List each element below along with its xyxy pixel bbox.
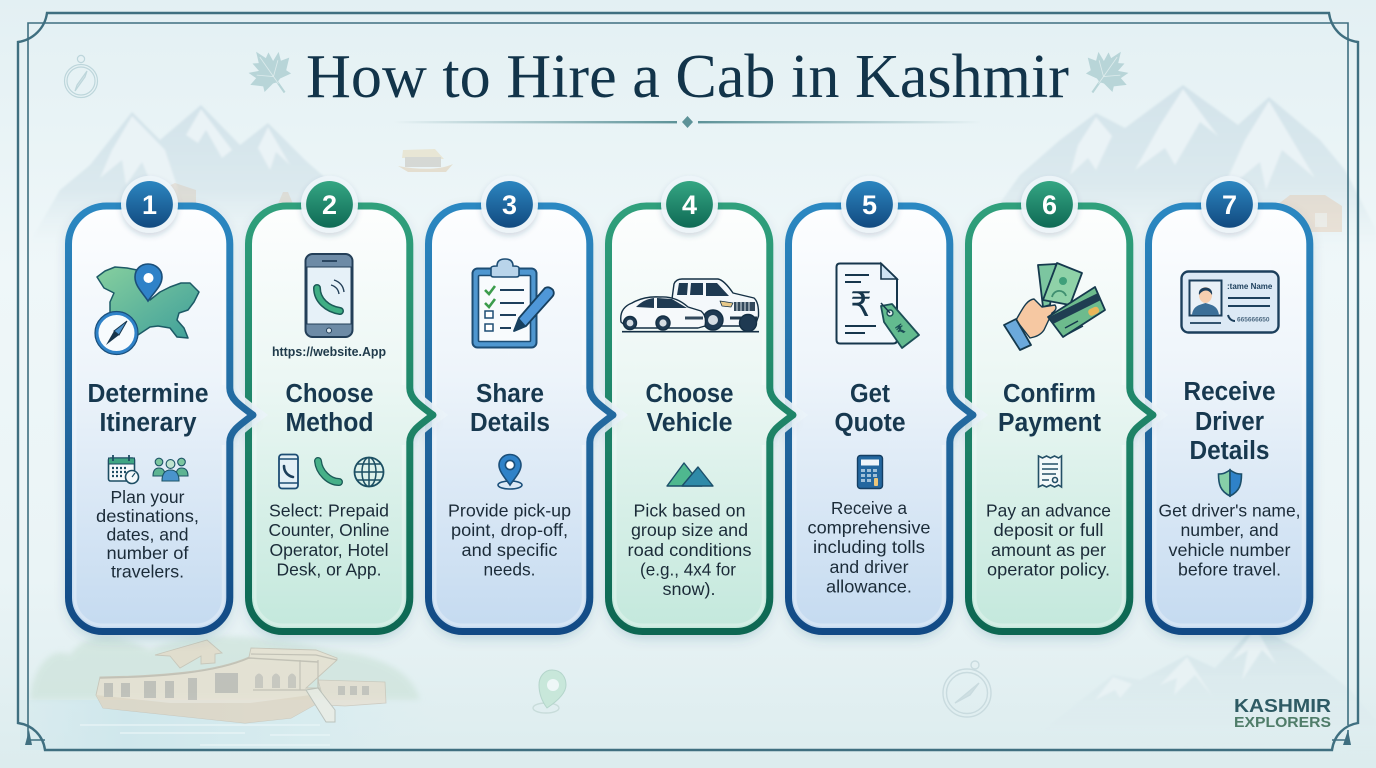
compass decoration bottom <box>943 661 991 717</box>
heading <box>286 380 374 437</box>
heading: Confirm <box>1003 380 1096 408</box>
description: needs. <box>484 560 536 580</box>
description: Operator, Hotel <box>270 540 388 560</box>
number badge 4 <box>661 176 718 233</box>
heading: Choose <box>286 380 374 408</box>
description: travelers. <box>111 562 184 582</box>
number badge 3 <box>481 176 538 233</box>
mountains top right <box>970 85 1376 250</box>
panel: step 5 get quote <box>788 176 973 632</box>
description: (e.g., 4x4 for <box>640 560 736 580</box>
icon row: phone, handset, globe <box>279 454 384 488</box>
description: snow). <box>662 579 716 599</box>
panel: step 3 share details <box>428 176 613 632</box>
maple leaf left <box>237 38 304 106</box>
number badge 2: 2 <box>322 190 337 220</box>
icon: quote document with rupee tag: ₹ <box>850 285 872 325</box>
icon: location pin <box>498 454 522 489</box>
number badge 5 <box>841 176 898 233</box>
heading <box>998 380 1101 437</box>
heading <box>834 380 906 437</box>
heading <box>646 380 734 437</box>
number badge 6: 6 <box>1042 190 1057 220</box>
heading: Get <box>850 380 890 408</box>
website label: https://website.App <box>272 345 386 359</box>
mountains top left <box>28 105 385 245</box>
icon: sedan and SUV <box>621 279 759 332</box>
description: Receive a <box>831 498 907 518</box>
number badge 4: 4 <box>682 190 697 220</box>
heading: Quote <box>834 409 906 437</box>
description: and specific <box>462 540 558 560</box>
icon: receipt <box>1038 456 1062 487</box>
compass decoration top left <box>64 55 98 98</box>
description: Counter, Online <box>268 520 390 540</box>
description: Pick based on <box>634 500 746 520</box>
heading: Determine <box>88 380 208 408</box>
icon: shield <box>1218 470 1242 496</box>
number badge 3: 3 <box>502 190 517 220</box>
description: Get driver's name, <box>1158 500 1300 520</box>
icon: driver ID card: 665666650 <box>1237 316 1270 324</box>
icon: clipboard with pencil <box>472 259 554 348</box>
number badge 1 <box>121 176 178 233</box>
icon: quote document with rupee tag: ₹ <box>893 322 909 339</box>
description: and driver <box>830 557 909 577</box>
number badge 7: 7 <box>1222 190 1237 220</box>
panel: step 2 choose method <box>248 176 433 632</box>
description: Provide pick-up <box>448 500 571 520</box>
logo: EXPLORERS <box>1234 715 1331 731</box>
icon: calculator <box>858 456 882 488</box>
icon row: calendar and people <box>108 455 188 484</box>
icon: hand with cash and card <box>1004 263 1105 350</box>
heading: Vehicle <box>646 409 732 437</box>
number badge 1: 1 <box>142 190 157 220</box>
title: How to Hire a Cab in Kashmir <box>306 43 1069 111</box>
icon: driver ID card <box>1182 272 1278 332</box>
description: dates, and <box>106 524 188 544</box>
distant temple <box>160 183 293 204</box>
description: Pay an advance <box>986 500 1111 520</box>
heading: Share <box>476 380 544 408</box>
heading: Choose <box>646 380 734 408</box>
description: before travel. <box>1178 560 1281 580</box>
heading: Itinerary <box>100 409 197 437</box>
distant houseboat right <box>1277 195 1342 232</box>
heading <box>1184 378 1276 465</box>
panel: step 4 choose vehicle <box>608 176 793 632</box>
description: allowance. <box>826 576 912 596</box>
icon: driver ID card: :tame Name <box>1227 282 1273 291</box>
number badge 7 <box>1201 176 1258 233</box>
description: group size and <box>631 520 748 540</box>
maple leaf right <box>1073 38 1140 106</box>
description: vehicle number <box>1168 540 1291 560</box>
icon: Kashmir map with pin and compass <box>95 264 199 354</box>
description: deposit or full <box>994 520 1104 540</box>
description: number of <box>106 543 189 563</box>
description: including tolls <box>813 537 925 557</box>
panel: step 6 confirm payment <box>968 176 1153 632</box>
heading <box>470 380 550 437</box>
panel: step 7 receive driver details <box>1148 176 1310 632</box>
description <box>96 487 199 582</box>
description: number, and <box>1180 520 1278 540</box>
description <box>986 500 1111 580</box>
description <box>448 500 571 580</box>
description: Plan your <box>110 487 185 507</box>
description: operator policy. <box>987 560 1110 580</box>
panel: step 1 determine itinerary <box>68 176 253 632</box>
number badge 5: 5 <box>862 190 877 220</box>
icon: mountains <box>667 463 713 486</box>
number badge 6 <box>1021 176 1078 233</box>
description: Select: Prepaid <box>269 500 389 520</box>
description: destinations, <box>96 506 199 526</box>
description: point, drop-off, <box>451 520 568 540</box>
heading: Driver <box>1195 408 1264 436</box>
heading: Receive <box>1184 378 1276 406</box>
heading: Details <box>1190 437 1270 465</box>
description: road conditions <box>628 540 752 560</box>
houseboat illustration <box>96 640 386 723</box>
heading: Details <box>470 409 550 437</box>
description: Desk, or App. <box>276 560 382 580</box>
map pin decoration bottom <box>533 670 566 713</box>
logo <box>1234 695 1331 731</box>
description <box>268 500 390 580</box>
logo: KASHMIR <box>1234 695 1331 716</box>
description <box>808 498 931 596</box>
heading <box>88 380 208 437</box>
description: comprehensive <box>808 518 931 538</box>
heading: Method <box>286 409 374 437</box>
shikara boat <box>398 149 453 172</box>
description <box>628 500 752 599</box>
icon: smartphone with call <box>306 254 352 337</box>
trees and lake behind houseboat <box>20 637 440 750</box>
description: amount as per <box>991 540 1106 560</box>
number badge 2 <box>301 176 358 233</box>
title divider <box>393 116 982 128</box>
heading: Payment <box>998 409 1101 437</box>
mountains bottom right <box>1030 625 1376 750</box>
icon: quote document with rupee tag <box>836 264 919 348</box>
description <box>1158 500 1300 580</box>
